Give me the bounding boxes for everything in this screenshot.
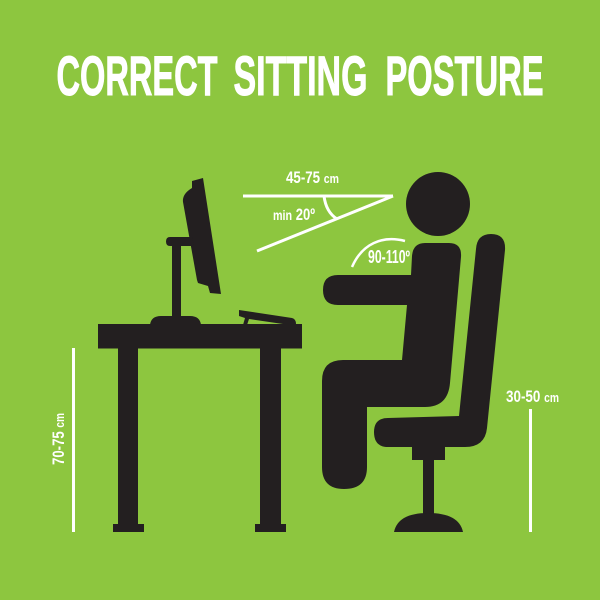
label: seat height: 30-50 cm (506, 387, 559, 406)
icon: computer monitor on stand (150, 178, 221, 325)
elbow angle arc (352, 239, 405, 267)
person figure (322, 172, 470, 489)
label: desk height: 70-75 cm (49, 413, 68, 465)
seat height line (529, 409, 532, 532)
person body (322, 243, 461, 489)
title: SITTING (234, 44, 368, 107)
label: viewing angle: min 20º (273, 205, 315, 224)
title: CORRECT (56, 44, 218, 107)
title (56, 44, 544, 107)
label: viewing distance: 45-75 cm (286, 169, 339, 187)
viewing distance and angle lines (243, 196, 393, 251)
desk (98, 324, 302, 532)
label: elbow angle: 90-110º (368, 247, 410, 267)
office chair (374, 234, 505, 532)
person head (406, 172, 470, 236)
icon: keyboard (239, 310, 296, 325)
desk height line (72, 348, 75, 532)
